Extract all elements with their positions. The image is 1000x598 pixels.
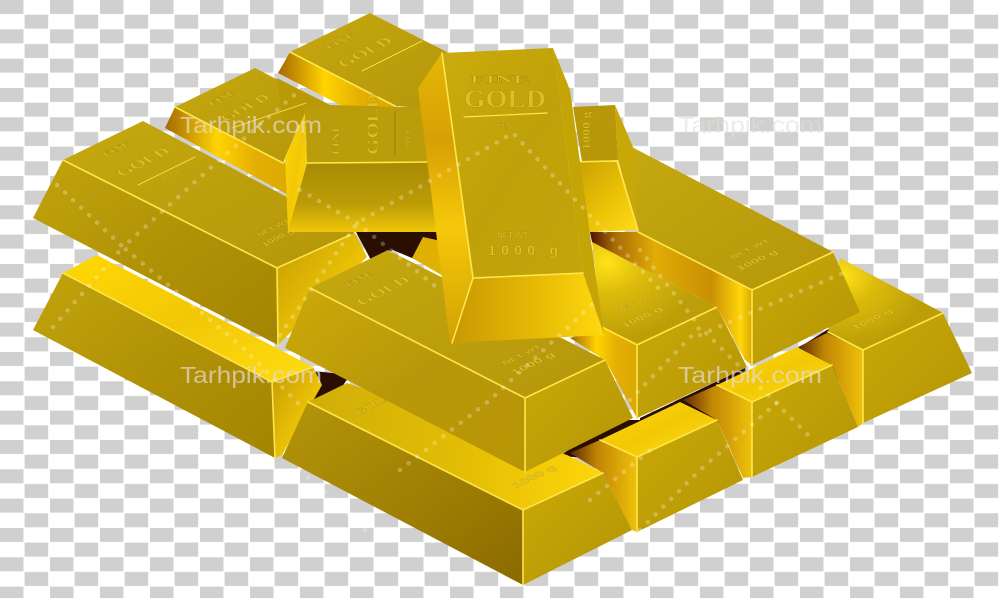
gold bar: middle front (285, 250, 633, 472)
gold bar: middle layer, right (590, 147, 860, 365)
gold bar: upper left (33, 121, 367, 345)
gold bar: crosswise behind standing bar: 1000 g (580, 111, 593, 150)
gold bar: middle front: FINE (343, 270, 376, 288)
watermark: Tarhpik.com top right: Tarhpik.com (678, 112, 822, 138)
watermark: Tarhpik.com bottom left: Tarhpik.com (180, 362, 322, 388)
gold bar: upper left: NET WT (255, 218, 292, 238)
gold bar: middle layer, right: 1000 g (735, 249, 781, 272)
gold bar: back row second (165, 68, 395, 196)
gold bar: middle front: GOLD (352, 274, 414, 308)
gold bar: crosswise on top: 999.9 (406, 130, 412, 148)
gold bar: bottom front (282, 383, 632, 585)
gold bar: back row second: FINE (206, 89, 239, 107)
gold bar: middle layer, centre right (570, 242, 747, 418)
gold bar: crosswise on top: FINE (331, 124, 342, 155)
bar stamp text: FINE (470, 72, 530, 86)
gold bar: bottom left (33, 255, 322, 458)
gold bar: upper left: 999.9 (160, 170, 182, 182)
gold bar: upper left: FINE (100, 140, 133, 158)
watermark: Tarhpik.com top left: Tarhpik.com (180, 112, 322, 138)
bar stamp text (464, 72, 558, 258)
gold bar: bottom front: 1000 g (509, 464, 559, 489)
dark gaps between bars (300, 230, 865, 462)
dotted diamond watermark (53, 90, 850, 530)
bar stamp text: 1000 g (488, 242, 558, 258)
gold bar: bottom right: 1000 g (850, 308, 896, 331)
gold bar: middle front: NET WT (500, 344, 544, 366)
gold bar: upper left: 1000 g (259, 228, 297, 248)
gold bar: middle front: 1000 g (508, 351, 558, 376)
gold bar: back row top: GOLD (333, 34, 397, 70)
gold bar: back row top: FINE (324, 32, 359, 51)
gold bar: bottom row, third from right (683, 347, 858, 478)
gold wedge behind centre (412, 237, 450, 280)
gold bar: bottom row, fourth from right (570, 402, 743, 532)
gold bar: crosswise on top: GOLD (364, 93, 382, 155)
gold bar: upper left: GOLD (112, 145, 174, 179)
gold bar: middle layer, centre right: 1000 g (620, 306, 666, 329)
bar stamp text: NET WT (497, 231, 528, 240)
watermark: Tarhpik.com bottom right: Tarhpik.com (678, 362, 822, 388)
gold bar: bottom front: GOLD (350, 390, 399, 417)
gold bar: bottom right (798, 258, 972, 427)
gold bar: standing centre (418, 48, 604, 343)
gold bar: middle layer, right: NET WT (728, 238, 772, 260)
gold bar: back row second: GOLD (217, 92, 274, 124)
gold bar: back row top (278, 13, 450, 110)
gold bar: crosswise on top (285, 93, 437, 232)
gold bar: crosswise behind standing bar (570, 105, 638, 232)
bar stamp text: GOLD (464, 86, 546, 113)
bar stamp text: 999.9 (493, 123, 511, 130)
gold bar: middle layer, centre right: NET WT (612, 292, 656, 314)
